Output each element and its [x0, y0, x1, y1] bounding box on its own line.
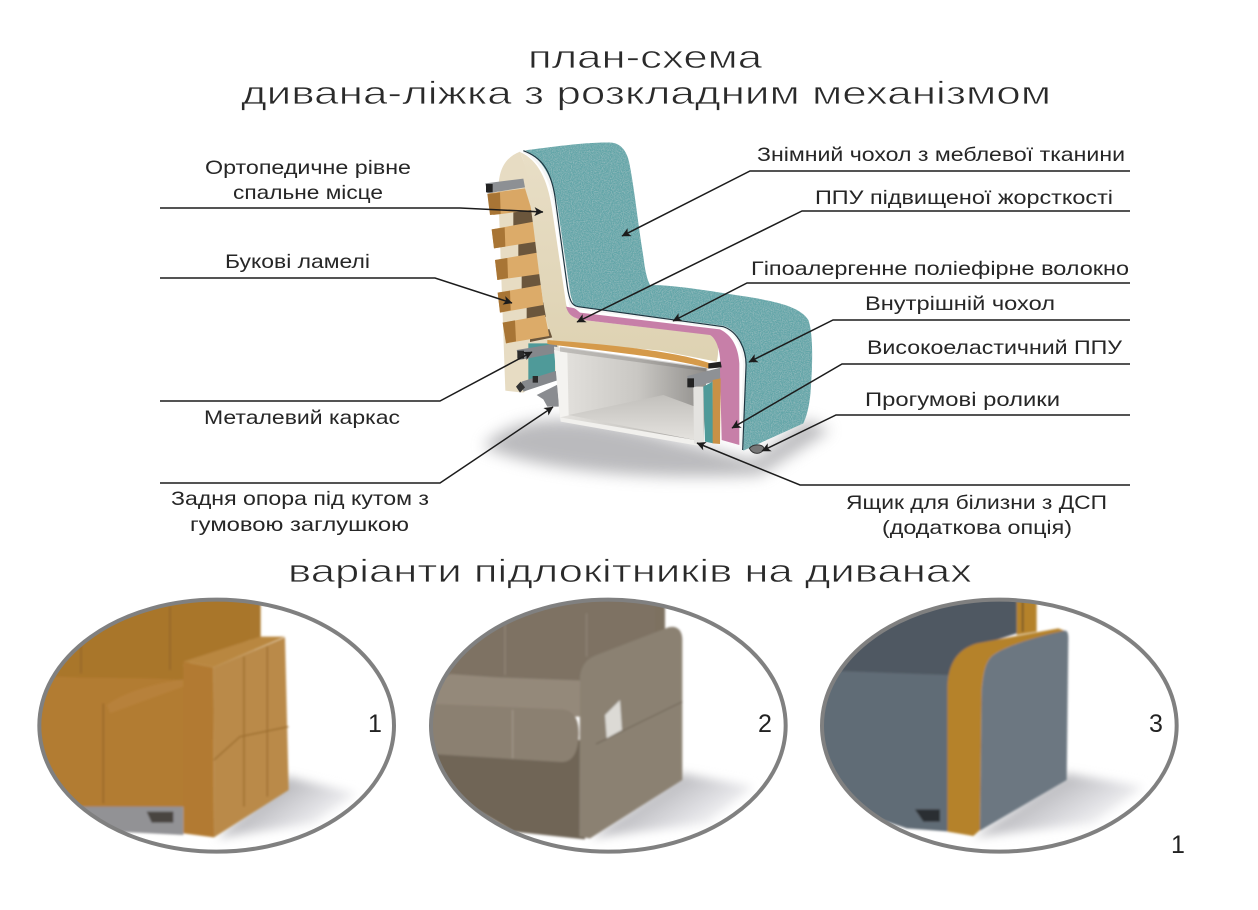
callout: rubber rollers: Прогумові ролики [865, 389, 1060, 411]
wooden base sheet [547, 340, 710, 368]
callout: storage box: Ящик для білизни з ДСП [846, 492, 1107, 514]
title: дивана-ліжка з розкладним механізмом [241, 75, 1051, 111]
ellipse outline [39, 600, 394, 852]
armrest option 1 [20, 590, 394, 852]
rear beige panel [498, 152, 560, 393]
leader lines and arrows [160, 171, 1130, 485]
heading: armrest options: варіанти підлокітників на диванах [288, 553, 972, 589]
beech slats [487, 188, 553, 343]
white inner cover [575, 307, 745, 447]
rear teal lining [528, 343, 555, 387]
sofa bed cutaway illustration [483, 143, 830, 477]
number 2: 2 [758, 710, 772, 738]
callout: storage box [846, 492, 1107, 539]
armrest option 2 [420, 590, 786, 852]
callout: rear support: гумовою заглушкою [190, 514, 409, 536]
title: план-схема [528, 39, 762, 75]
callout: firm foam: ППУ підвищеної жорсткості [815, 187, 1113, 209]
callout: high elastic foam: Високоеластичний ППУ [867, 337, 1123, 359]
foam and seat layers [520, 152, 718, 362]
floor shadow [483, 420, 830, 477]
callout: inner cover: Внутрішній чохол [865, 293, 1055, 315]
callout: beech slats: Букові ламелі [225, 251, 370, 273]
white fiber line back [524, 151, 580, 313]
storage box [554, 347, 708, 447]
ellipse outline [431, 600, 786, 852]
callout: rear support: Задня опора під кутом з [171, 488, 429, 510]
lower foam strips [703, 382, 713, 443]
teal seat and back upholstery [523, 143, 812, 451]
callout: metal frame: Металевий каркас [204, 407, 400, 429]
dark outer edge [523, 151, 746, 450]
callout: rear support [171, 488, 429, 536]
page number: 1 [1171, 831, 1185, 859]
callout: removable cover: Знімний чохол з меблевої тканини [757, 144, 1125, 166]
rubber rollers [749, 445, 764, 453]
pink padding layer [566, 307, 739, 445]
callout: orthopedic sleeping surface: спальне місце [233, 182, 383, 204]
metal frame rear [485, 179, 560, 407]
callout: storage box: (додаткова опція) [882, 517, 1072, 539]
callout: polyester fiber: Гіпоалергенне поліефірне волокно [751, 258, 1129, 280]
armrest option 3 [810, 590, 1177, 852]
number 3: 3 [1149, 710, 1163, 738]
title [241, 39, 1051, 111]
number 1: 1 [368, 710, 382, 738]
ellipse outline [822, 600, 1177, 852]
metal frame front [687, 367, 723, 388]
callout: orthopedic sleeping surface [205, 157, 411, 204]
callout: orthopedic sleeping surface: Ортопедичне рівне [205, 157, 411, 179]
